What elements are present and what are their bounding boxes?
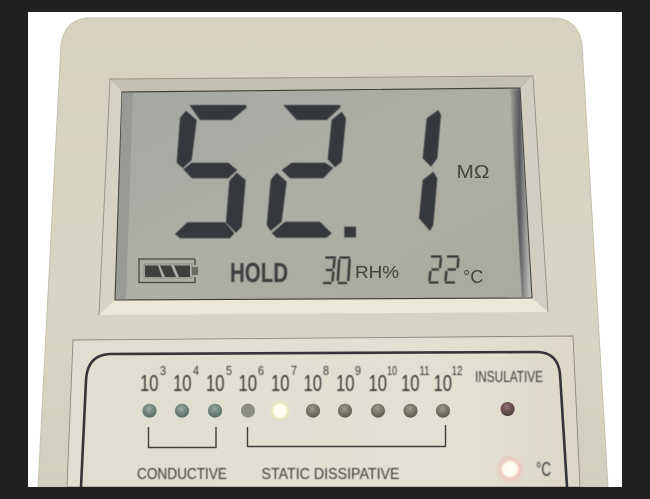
scale labels: 4 [193,364,199,378]
scale labels: 10 [401,370,420,396]
rounded scale outline [81,352,567,487]
scale labels: 10 [434,370,452,396]
scale labels: 10 [304,370,322,396]
temperature unit label: °C [536,459,551,481]
humidity reading [323,258,399,283]
scale labels: 10 [336,370,354,396]
decimal point [344,227,356,237]
lower label plate [67,336,580,487]
conductive label: CONDUCTIVE [137,466,227,483]
digit 1 [419,110,441,231]
scale labels: 12 [452,364,463,378]
scale labels: 10 [173,370,192,396]
insulative label: INSULATIVE [475,369,543,386]
scale labels: 10 [140,370,158,396]
insulative LED [501,402,515,416]
scale labels: 7 [291,364,297,378]
scale labels: 9 [355,364,361,378]
conductive bracket [148,427,216,448]
temperature reading [429,256,484,287]
scale labels: 10 [368,370,387,396]
humidity digits 30 [323,258,350,283]
bottom dark band [0,487,650,499]
scale labels [140,364,463,396]
lit LED at 10^7 [269,400,291,422]
scale labels: 8 [323,364,329,378]
scale labels: 10 [206,370,224,396]
scale labels: 10 [387,364,397,378]
scale labels: 10 [238,370,257,396]
lit temperature LED [494,453,526,485]
icon: battery [139,259,198,282]
LCD panel [115,88,532,300]
scale labels: 5 [226,364,232,378]
static dissipative bracket [248,425,446,446]
unit: megaohm: MΩ [456,162,490,182]
indicator LEDs [142,400,515,422]
temperature unit: °C [463,267,484,287]
display bezel [99,76,548,315]
scale labels: 10 [271,370,290,396]
temperature digits 22 [429,256,458,282]
scale labels: 3 [160,364,166,378]
static dissipative label: STATIC DISSIPATIVE [262,466,400,483]
scale labels: 11 [420,364,430,378]
HOLD indicator: HOLD [230,257,288,288]
digit 5 [175,105,247,238]
humidity label: RH% [355,262,399,282]
scale labels: 6 [258,364,264,378]
main reading 52.1 [175,105,441,238]
digit 2 [267,105,346,238]
